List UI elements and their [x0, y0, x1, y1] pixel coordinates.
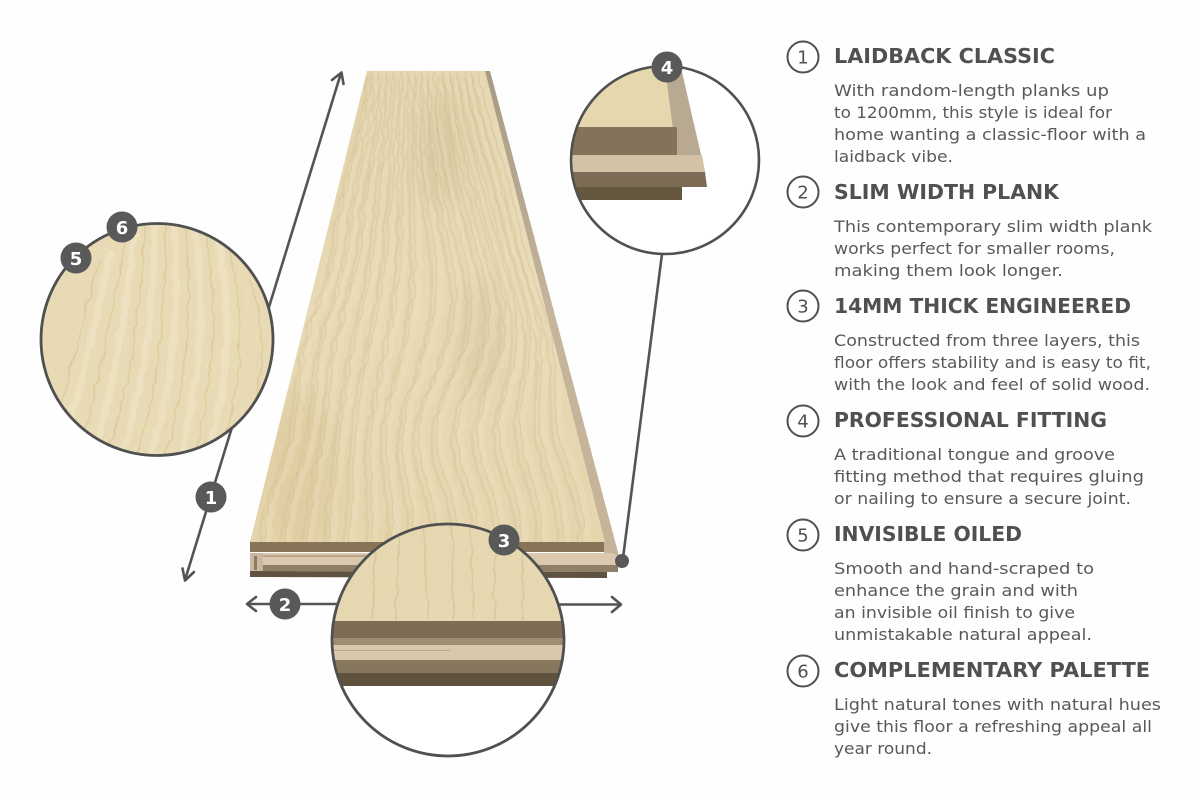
plank top face with wood grain — [250, 71, 605, 542]
badge 6: 6 — [116, 218, 128, 239]
feature 6: Complementary Palette: Light natural tones with natural hues — [834, 695, 1161, 714]
badge 1: 1 — [205, 488, 217, 509]
feature 5: Invisible Oiled: INVISIBLE OILED — [834, 522, 1022, 546]
feature 2: Slim Width Plank: 2 — [797, 182, 809, 204]
feature 5: Invisible Oiled: unmistakable natural appeal. — [834, 625, 1092, 644]
detail circle: plank cross-section (3) — [330, 520, 566, 756]
illustration: oak floor plank — [240, 60, 620, 578]
feature 2: Slim Width Plank: making them look longer. — [834, 261, 1063, 280]
feature 3: 14mm Thick Engineered: 3 — [797, 296, 809, 318]
feature 3: 14mm Thick Engineered: Constructed from three layers, this — [834, 331, 1140, 350]
detail circle: grain close-up (5, 6) — [40, 220, 276, 460]
feature 4: Professional Fitting: fitting method that requires gluing — [834, 467, 1144, 486]
cross-section layers — [330, 520, 566, 686]
badge 3 — [488, 524, 520, 556]
feature 4: Professional Fitting: or nailing to ensure a secure joint. — [834, 489, 1131, 508]
feature 3: 14mm Thick Engineered: floor offers stability and is easy to fit, — [834, 353, 1151, 372]
feature 5: Invisible Oiled: 5 — [797, 526, 809, 546]
feature 3: 14mm Thick Engineered: with the look and feel of solid wood. — [834, 375, 1150, 394]
badge 3: 3 — [498, 531, 510, 552]
arrow: plank length dimension (1) — [182, 72, 344, 580]
plank side edge — [485, 71, 619, 556]
corner profile — [572, 68, 707, 200]
feature 1: Laidback Classic: With random-length planks up — [834, 81, 1109, 100]
feature 1: Laidback Classic: LAIDBACK CLASSIC — [834, 44, 1055, 68]
feature 4: Professional Fitting: PROFESSIONAL FITTING — [834, 408, 1107, 432]
badge 1 — [196, 482, 226, 512]
feature 3: 14mm Thick Engineered — [788, 290, 1151, 394]
feature 4: Professional Fitting: 4 — [797, 412, 809, 432]
feature 6: Complementary Palette — [788, 656, 1161, 758]
feature 1: Laidback Classic: laidback vibe. — [834, 147, 953, 166]
badge 2: 2 — [279, 595, 291, 616]
feature 6: Complementary Palette: COMPLEMENTARY PALETTE — [834, 658, 1150, 682]
badge 5 — [60, 242, 92, 274]
feature 5: Invisible Oiled: an invisible oil finish to give — [834, 603, 1075, 622]
feature 4: Professional Fitting — [788, 406, 1144, 508]
feature 2: Slim Width Plank: This contemporary slim width plank — [833, 217, 1153, 236]
feature 6: Complementary Palette: give this floor a refreshing appeal all — [834, 717, 1152, 736]
arrow: plank width dimension (2) — [247, 597, 621, 612]
feature 1: Laidback Classic: 1 — [797, 48, 809, 68]
feature 2: Slim Width Plank: works perfect for smaller rooms, — [834, 239, 1115, 258]
feature 1: Laidback Classic — [788, 42, 1146, 166]
feature 6: Complementary Palette: year round. — [834, 739, 932, 758]
feature 4: Professional Fitting: A traditional tongue and groove — [834, 445, 1115, 464]
feature 2: Slim Width Plank — [788, 176, 1153, 280]
feature 5: Invisible Oiled — [788, 520, 1094, 644]
feature 5: Invisible Oiled: enhance the grain and with — [834, 581, 1078, 600]
badge 4 — [652, 52, 682, 82]
badge 2 — [270, 588, 300, 620]
feature 2: Slim Width Plank: SLIM WIDTH PLANK — [834, 180, 1061, 204]
feature 6: Complementary Palette: 6 — [797, 662, 809, 682]
grain texture — [61, 225, 264, 454]
badge 6 — [106, 212, 138, 242]
connector dot — [615, 554, 629, 568]
feature 1: Laidback Classic: to 1200mm, this style is ideal for — [834, 103, 1112, 122]
plank end profile — [250, 541, 618, 578]
detail circle: tongue and groove corner (4) — [560, 60, 759, 254]
feature 5: Invisible Oiled: Smooth and hand-scraped to — [834, 559, 1094, 578]
badge 4: 4 — [661, 58, 673, 79]
feature 3: 14mm Thick Engineered: 14MM THICK ENGINEERED — [834, 294, 1131, 318]
badge 5: 5 — [70, 249, 82, 270]
feature 1: Laidback Classic: home wanting a classic-floor with a — [834, 125, 1146, 144]
connector line: dot to circle 4 — [623, 254, 662, 558]
